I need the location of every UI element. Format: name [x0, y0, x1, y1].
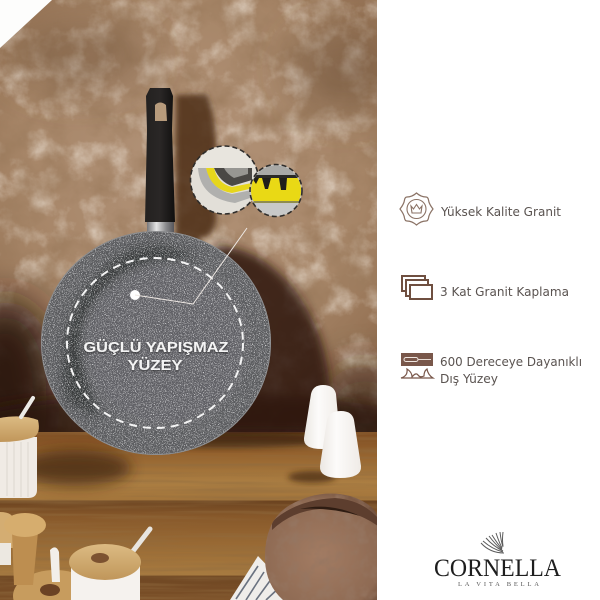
label: Yüksek Kalite Granit — [440, 205, 561, 219]
steel ferrule — [147, 222, 174, 232]
salt shaker rear — [304, 385, 340, 449]
corner white triangle — [0, 0, 52, 48]
callout line — [130, 228, 247, 304]
dashed circle — [67, 258, 243, 428]
feature: heat resistant exterior — [401, 353, 582, 386]
pan inner wall shading — [63, 246, 200, 420]
stucco wall background — [0, 0, 377, 432]
brand logo — [434, 532, 561, 588]
granite frying pan — [41, 231, 271, 455]
feature: 3 layer coating — [402, 276, 569, 299]
wordmark: CORNELLA — [434, 555, 561, 582]
bread loaf — [264, 490, 378, 600]
icon: crown badge — [400, 193, 433, 225]
striped cloth — [230, 556, 283, 600]
pan handle — [145, 88, 175, 232]
left ribbed jar — [0, 398, 39, 498]
feature: high quality granite — [400, 193, 561, 225]
label: 3 Kat Granit Kaplama — [440, 285, 569, 299]
pan label — [84, 339, 228, 374]
bottom-left wooden spice rack — [0, 512, 71, 600]
handle shadow — [175, 94, 216, 250]
pan label: GÜÇLÜ YAPIŞMAZ — [84, 339, 228, 356]
feature: heat resistant exterior: Dış Yüzey — [440, 372, 498, 386]
label: 600 Dereceye Dayanıklı — [440, 355, 582, 369]
icon: stacked layers — [402, 276, 432, 299]
inset: small coating detail circle — [250, 164, 302, 217]
pan label: YÜZEY — [128, 357, 182, 374]
photo: pan on wall and kitchen table — [0, 0, 377, 600]
wooden table — [0, 432, 377, 600]
bottom jar with spoon — [69, 529, 150, 600]
right white panel — [377, 0, 600, 600]
icon: oven with flames — [401, 353, 433, 378]
icon: feather fan — [481, 532, 504, 553]
inset: large cross-section circle — [190, 146, 262, 214]
pan shadow — [209, 238, 337, 438]
handle hole — [155, 102, 167, 121]
salt shaker front — [320, 411, 361, 478]
tagline: LA VITA BELLA — [458, 581, 539, 588]
